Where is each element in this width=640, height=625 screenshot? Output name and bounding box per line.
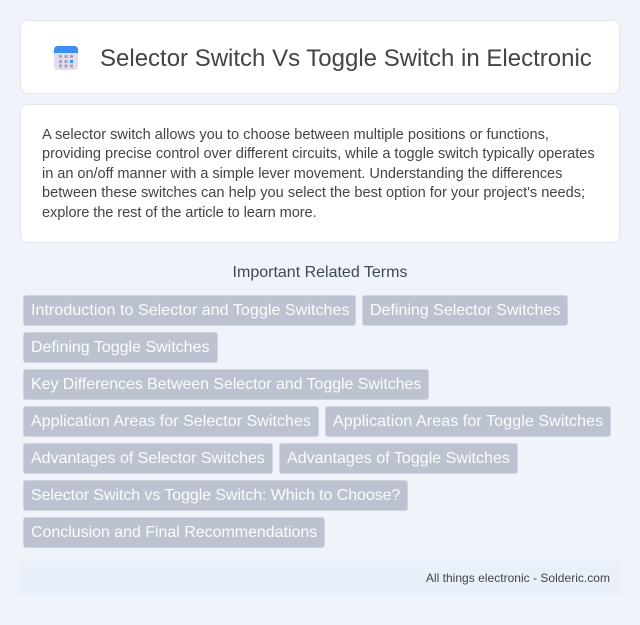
tag: defining toggle: Defining Toggle Switches: [31, 339, 209, 356]
tag: application toggle: Application Areas for Toggle Switches: [333, 413, 603, 430]
footer credit: All things electronic - Solderic.com: [426, 571, 610, 585]
tag: introduction: Introduction to Selector and Toggle Switches: [31, 302, 350, 319]
tag: application toggle: [325, 406, 611, 437]
tag: which to choose: Selector Switch vs Toggle Switch: Which to Choose?: [31, 487, 400, 504]
tag: advantages selector: Advantages of Selector Switches: [31, 450, 265, 467]
intro paragraph: A selector switch allows you to choose between multiple positions or functions,: [42, 127, 549, 143]
tag list: [23, 295, 611, 548]
tag: advantages selector: [23, 443, 273, 474]
tag: application selector: Application Areas for Selector Switches: [31, 413, 311, 430]
tag: which to choose: [23, 480, 408, 511]
tag: defining selector: [362, 295, 568, 326]
tag: defining selector: Defining Selector Switches: [370, 302, 560, 319]
section heading: important related terms: Important Related Terms: [233, 264, 407, 281]
tag: conclusion: Conclusion and Final Recommendations: [31, 524, 317, 541]
tag: advantages toggle: [279, 443, 518, 474]
intro paragraph: in an on/off manner with a simple lever movement. Understanding the differences: [42, 166, 562, 182]
icon: calendar grid: [54, 46, 78, 70]
intro paragraph: [42, 127, 595, 221]
tag: introduction: [23, 295, 356, 326]
tag: key differences: Key Differences Between Selector and Toggle Switches: [31, 376, 421, 393]
title: Selector Switch Vs Toggle Switch in Electronic: [100, 45, 592, 72]
intro paragraph: explore the rest of the article to learn more.: [42, 205, 317, 221]
intro paragraph: between these switches can help you select the best option for your project's needs;: [42, 185, 585, 201]
header panel: [20, 20, 620, 94]
footer bar: [20, 561, 620, 595]
tag: advantages toggle: Advantages of Toggle Switches: [287, 450, 510, 467]
intro paragraph: providing precise control over different circuits, while a toggle switch typically operates: [42, 146, 595, 162]
intro text panel: [20, 104, 620, 243]
tag: conclusion: [23, 517, 325, 548]
tag: application selector: [23, 406, 319, 437]
tag: key differences: [23, 369, 429, 400]
tag: defining toggle: [23, 332, 218, 363]
